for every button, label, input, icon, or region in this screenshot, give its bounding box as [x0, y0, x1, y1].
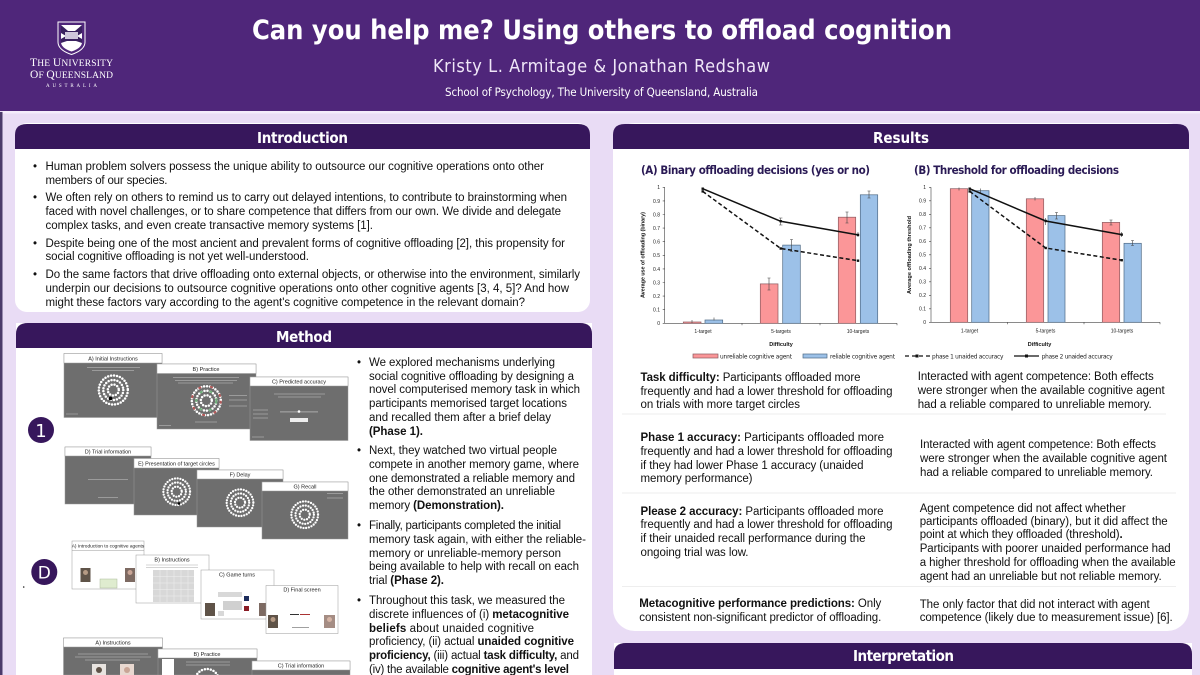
authors: Kristy L. Armitage & Jonathan Redshaw [433, 56, 770, 77]
badge: demonstration: D [38, 564, 51, 584]
finding: phase 1 accuracy: frequently and had a lower threshold for offloading [640, 446, 892, 458]
chart: threshold for offloading decisions: 0.1 [919, 306, 926, 312]
text block: method bullets: memory (Demonstration). [369, 500, 504, 512]
finding: phase 2 accuracy: a higher threshold for offloading when the available [920, 557, 1176, 569]
chart: threshold for offloading decisions [907, 163, 1160, 348]
chart: threshold for offloading decisions: 0.3 [919, 280, 926, 286]
chart: binary offloading decisions: 1 [657, 185, 660, 191]
finding: task difficulty: were stronger when the available cognitive agent [917, 385, 1165, 397]
text block: method bullets: Throughout this task, we measured the [369, 595, 565, 607]
figure: demonstration screens: D) Final screen [283, 588, 321, 594]
chart: binary offloading decisions [640, 163, 897, 348]
chart: binary offloading decisions: 5-targets [771, 329, 791, 335]
text block: method bullets: social cognitive offloading by designing a [369, 371, 575, 383]
figure: phase 1 practice screens: A) Initial Instructions [88, 356, 138, 362]
text block: method bullets: proficiency, (iii) actual task difficulty, and [369, 650, 579, 662]
chart legend: phase 2 unaided accuracy [1042, 352, 1113, 360]
finding: phase 2 accuracy: frequently and had a lower threshold for offloading [640, 519, 892, 531]
text block: method bullets: proficiency, (ii) actual unaided cognitive [369, 636, 574, 648]
finding: metacognitive performance predictions: The only factor that did not interact with agent [920, 599, 1150, 611]
text block: introduction bullets [33, 161, 580, 309]
finding: phase 1 accuracy: had a reliable compared to unreliable memory. [920, 467, 1153, 479]
logo: The University of Queensland: THE UNIVERSITY [30, 57, 113, 69]
finding: phase 2 accuracy: Agent competence did not affect whether [920, 503, 1126, 515]
figure: phase 1 trial screens: G) Recall [294, 484, 316, 490]
figure: phase 2 screens [64, 638, 350, 675]
finding: phase 2 accuracy: ongoing trial was low. [640, 547, 748, 559]
badge: phase 1: 1 [35, 421, 47, 442]
text block: method bullets: (Phase 1). [369, 426, 423, 438]
text block: introduction bullets: We often rely on others to remind us to carry out delayed intentions, to contribute to brainstorming when [46, 192, 567, 204]
chart: binary offloading decisions: 0.2 [653, 294, 660, 300]
chart: binary offloading decisions: 0.9 [653, 199, 660, 205]
text block: introduction bullets: members of our species. [46, 175, 168, 187]
finding: phase 2 accuracy: agent had an unreliable but not reliable memory. [920, 571, 1162, 583]
title: Can you help me? Using others to offload cognition [252, 15, 952, 46]
chart: threshold for offloading decisions: 0.5 [919, 252, 926, 258]
chart: binary offloading decisions: 0.3 [653, 280, 660, 286]
figure: phase 1 trial screens: D) Trial information [85, 450, 131, 456]
chart: threshold for offloading decisions: 1-target [961, 328, 979, 334]
chart: binary offloading decisions: 0.7 [653, 226, 660, 232]
text block: introduction bullets: social cognitive offloading is not yet well-understood. [46, 251, 309, 263]
chart legend [693, 352, 1113, 360]
chart: binary offloading decisions: 0 [657, 321, 660, 327]
text block: method bullets: trial (Phase 2). [369, 575, 444, 587]
finding: phase 2 accuracy: Please 2 accuracy: Participants offloaded more [640, 506, 884, 518]
text block: method bullets: novel computerised memory task in which [369, 384, 580, 396]
text block: method bullets: • [357, 595, 361, 607]
figure: phase 1 practice screens: B) Practice [193, 367, 219, 373]
finding: phase 2 accuracy [640, 503, 1176, 583]
figure: phase 1 trial screens: E) Presentation of target circles [138, 462, 215, 468]
text block: method bullets: • [357, 520, 361, 532]
text block: method bullets: memory or unreliable-memory person [369, 548, 561, 560]
chart: binary offloading decisions: Difficulty [769, 342, 794, 348]
chart: binary offloading decisions: 0.4 [653, 267, 660, 273]
chart: threshold for offloading decisions: Average offloading threshold [907, 216, 913, 294]
chart: binary offloading decisions: 10-targets [847, 329, 870, 335]
text block: method bullets: and recalled them after a brief delay [369, 412, 551, 424]
chart: threshold for offloading decisions: 5-targets [1036, 328, 1056, 334]
finding: phase 1 accuracy: memory performance) [640, 473, 753, 485]
chart title A: (A) Binary offloading decisions (yes or no) [641, 163, 870, 177]
chart: binary offloading decisions: 0.6 [653, 240, 660, 246]
heading: Interpretation [614, 643, 1192, 669]
text block: method bullets: Next, they watched two virtual people [369, 445, 557, 457]
text block: method bullets: • [357, 357, 361, 369]
figure: phase 2 screens: B) Practice [194, 652, 220, 658]
text block: introduction bullets: might these factors vary according to the agent's cognitive competence in the relevant domain? [46, 297, 525, 309]
chart legend: unreliable cognitive agent [720, 352, 793, 360]
finding: metacognitive performance predictions [639, 598, 1173, 624]
heading: Interpretation: Interpretation [853, 647, 954, 665]
text block: method bullets: participants memorised target locations [369, 398, 567, 410]
text block: method bullets: • [357, 445, 361, 457]
finding: task difficulty: on trials with more target circles [640, 399, 800, 411]
panel: introduction [15, 123, 590, 312]
chart: threshold for offloading decisions: 0.6 [919, 239, 926, 245]
header banner [0, 0, 1200, 111]
finding: phase 1 accuracy: Phase 1 accuracy: Participants offloaded more [640, 432, 884, 444]
text block: introduction bullets: underpin our decisions to outsource cognitive operations onto other cognitive agents [3, 4, 5]? And how [46, 283, 570, 295]
logo: The University of Queensland: AUSTRALIA [46, 84, 97, 89]
figure: demonstration screens: A) Introduction to cognitive agents [72, 544, 145, 550]
finding: phase 2 accuracy: participants offloaded (binary), but it did affect the [920, 516, 1168, 528]
text block: introduction bullets: complex tasks, and even create transactive memory systems [1]. [46, 220, 373, 232]
chart: threshold for offloading decisions: 1 [923, 185, 926, 191]
figure: phase 1 practice screens [64, 354, 348, 440]
text block: method bullets: discrete influences of (i) metacognitive [369, 609, 569, 621]
chart: threshold for offloading decisions: 0.9 [919, 198, 926, 204]
figure: phase 1 practice screens: C) Predicted accuracy [272, 380, 326, 386]
figure: phase 2 screens: A) Instructions [95, 640, 131, 646]
text block: introduction bullets: • [33, 238, 37, 250]
affiliation: School of Psychology, The University of Queensland, Australia [445, 85, 758, 99]
finding: phase 1 accuracy: if they had lower Phase 1 accuracy (unaided [640, 460, 864, 472]
figure: phase 1 trial screens [65, 447, 348, 539]
badge: phase 1 [28, 417, 54, 443]
finding: phase 2 accuracy: if their unaided recall performance during the [640, 533, 866, 545]
finding: task difficulty: had a reliable compared to unreliable memory. [918, 399, 1152, 411]
results table: findings [622, 371, 1176, 624]
finding: task difficulty: Task difficulty: Participants offloaded more [640, 372, 860, 384]
panel: method [16, 323, 592, 675]
chart title B: (B) Threshold for offloading decisions [914, 163, 1119, 177]
logo: The University of Queensland [30, 22, 113, 89]
figure: demonstration screens [72, 541, 338, 634]
text block: method bullets: compete in another memory game, where [369, 459, 579, 471]
chart: binary offloading decisions: 1-target [694, 329, 712, 335]
finding: task difficulty: Interacted with agent competence: Both effects [918, 371, 1154, 383]
chart legend: reliable cognitive agent [830, 352, 896, 360]
text block: introduction bullets: • [33, 161, 37, 173]
text block: method bullets: being available to help with recall on each [369, 561, 579, 573]
chart: binary offloading decisions: 0.8 [653, 212, 660, 218]
finding: phase 2 accuracy: Participants with poorer unaided performance had [920, 543, 1171, 555]
chart: threshold for offloading decisions: Difficulty [1028, 342, 1052, 348]
text block: method bullets [357, 357, 586, 675]
text block: method bullets: one demonstrated a reliable memory and [369, 473, 575, 485]
figure: demonstration screens: B) Instructions [154, 558, 190, 564]
chart: binary offloading decisions: 0.5 [653, 253, 660, 259]
finding: task difficulty [640, 371, 1165, 411]
chart: binary offloading decisions: 0.1 [653, 308, 660, 314]
chart: threshold for offloading decisions: 0.4 [919, 266, 926, 272]
finding: metacognitive performance predictions: competence (likely due to measurement issue) [6]. [920, 612, 1173, 624]
chart: threshold for offloading decisions: 0 [923, 320, 926, 326]
text block: introduction bullets: • [33, 192, 37, 204]
heading: Method [16, 323, 592, 348]
text block: method bullets: memory task again, with either the reliable- [369, 534, 586, 546]
finding: task difficulty: frequently and had a lower threshold for offloading [640, 386, 892, 398]
finding: phase 2 accuracy: point at which they offloaded (threshold). [920, 529, 1123, 541]
logo: The University of Queensland: OF QUEENSLAND [30, 69, 113, 81]
heading: Introduction [15, 124, 590, 149]
text block: introduction bullets: • [33, 269, 37, 281]
figure: demonstration screens: C) Game turns [219, 572, 255, 578]
chart: threshold for offloading decisions: 0.8 [919, 212, 926, 218]
text block: introduction bullets: Despite being one of the most ancient and prevalent forms of cognitive offloading [2], this propensity for [46, 238, 565, 250]
text block: method bullets: We explored mechanisms underlying [369, 357, 555, 369]
heading: Results [613, 124, 1189, 149]
heading: Introduction: Introduction [257, 129, 348, 147]
heading: Method: Method [276, 328, 332, 346]
finding: phase 1 accuracy [640, 432, 1168, 485]
finding: metacognitive performance predictions: Metacognitive performance predictions: Only [639, 598, 882, 610]
text block: method bullets: the other demonstrated an unreliable [369, 486, 555, 498]
text block: method bullets: beliefs about unaided cognitive [369, 623, 534, 635]
badge: demonstration [31, 559, 57, 585]
text block: introduction bullets: Do the same factors that drive offloading onto external objects, or otherwise into the environment, similarly [46, 269, 580, 281]
chart: threshold for offloading decisions: 0.7 [919, 226, 926, 232]
chart: threshold for offloading decisions: 10-targets [1111, 328, 1134, 334]
text block: introduction bullets: faced with novel challenges, or to share competence that differs from our own. We divide and delegate [46, 206, 561, 218]
finding: phase 1 accuracy: Interacted with agent competence: Both effects [920, 439, 1156, 451]
text block: introduction bullets: Human problem solvers possess the unique ability to outsource our cognitive operations onto other [46, 161, 544, 173]
figure: phase 2 screens: C) Trial information [278, 664, 324, 670]
panel: results [613, 123, 1189, 631]
figure: phase 1 trial screens: F) Delay [230, 472, 251, 478]
chart: binary offloading decisions: Average use of offloading (binary) [640, 212, 646, 298]
text block: method bullets: Finally, participants completed the initial [369, 520, 561, 532]
panel: interpretation [614, 643, 1192, 675]
chart: threshold for offloading decisions: 0.2 [919, 293, 926, 299]
heading: Results: Results [873, 129, 929, 147]
chart legend: phase 1 unaided accuracy [932, 352, 1004, 360]
finding: phase 1 accuracy: were stronger when the available cognitive agent [919, 453, 1168, 465]
finding: metacognitive performance predictions: consistent non-significant predictor of offloading. [639, 612, 881, 624]
